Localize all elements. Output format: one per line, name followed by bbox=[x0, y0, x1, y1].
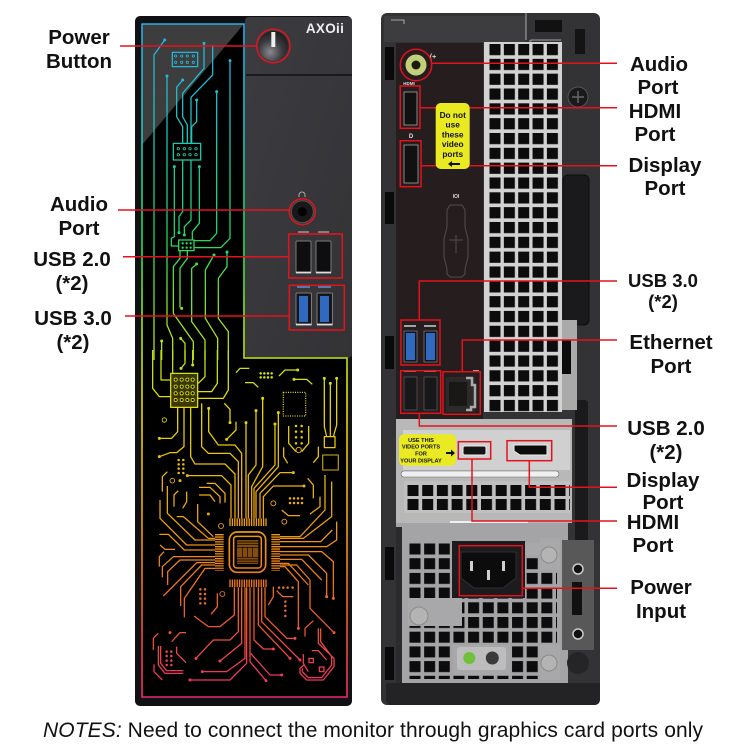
panel: front view of desktop tower bbox=[135, 16, 352, 706]
power supply grille bbox=[396, 523, 568, 692]
circuit traces lower bbox=[153, 350, 338, 681]
yellow instruction label bbox=[399, 434, 456, 466]
PSU screws bbox=[410, 547, 557, 671]
label: USB 3.0 rear: (*2) bbox=[648, 291, 678, 312]
rainbow outline bbox=[142, 24, 347, 697]
leader lines rear bbox=[419, 63, 617, 588]
front case body bbox=[135, 16, 352, 706]
rear case body bbox=[381, 13, 600, 705]
label: display port graphics card bbox=[627, 469, 700, 514]
metal patches around PSU fan holes bbox=[408, 538, 560, 680]
Ethernet port bbox=[443, 371, 480, 414]
DisplayPort graphics card bbox=[507, 441, 552, 461]
expansion bracket bbox=[396, 419, 572, 527]
yellow instruction label: YOUR DISPLAY bbox=[400, 459, 442, 465]
label: power input: Power bbox=[630, 576, 692, 599]
label: USB 3.0 rear: USB 3.0 bbox=[628, 270, 698, 291]
logo: AXOii bbox=[306, 21, 344, 36]
leader lines front bbox=[118, 46, 290, 316]
label: USB 2.0 front: USB 2.0 bbox=[33, 248, 111, 271]
label: USB 2.0 front bbox=[33, 248, 111, 295]
DisplayPort onboard bbox=[400, 134, 421, 187]
label: display port graphics card: Port bbox=[642, 491, 684, 514]
top rear lid bbox=[384, 16, 526, 42]
label: USB 2.0 rear bbox=[627, 417, 705, 464]
label: USB 2.0 rear: USB 2.0 bbox=[627, 417, 705, 440]
HDMI port onboard bbox=[400, 81, 420, 128]
yellow instruction label: VIDEO PORTS bbox=[402, 445, 440, 451]
label: USB 2.0 rear: (*2) bbox=[649, 441, 683, 464]
I/O plate bbox=[396, 43, 483, 419]
yellow warning label: video bbox=[442, 139, 464, 149]
label: ethernet port: Ethernet bbox=[629, 331, 713, 354]
label: ethernet port bbox=[629, 331, 713, 378]
label: USB 3.0 rear bbox=[628, 270, 698, 312]
HDMI port graphics card bbox=[458, 442, 491, 459]
label: HDMI port graphics card bbox=[627, 511, 679, 557]
glossy reflection bbox=[142, 24, 244, 145]
audio port rear bbox=[400, 49, 436, 81]
front grey fascia bbox=[245, 17, 352, 358]
label: USB 3.0 front bbox=[34, 307, 112, 354]
label: display port rear: Display bbox=[629, 154, 702, 177]
HDMI port onboard: HDMI bbox=[403, 81, 415, 86]
USB 3.0 ports front bbox=[289, 285, 344, 330]
label: display port graphics card: Display bbox=[627, 469, 700, 492]
label: audio port front: Audio bbox=[50, 193, 108, 216]
side mounting strip bbox=[562, 540, 594, 674]
label: audio port rear: Port bbox=[638, 76, 679, 99]
ventilation grille bbox=[484, 42, 562, 412]
DVI knockout bbox=[444, 194, 468, 277]
USB 2.0 ports rear bbox=[401, 371, 441, 413]
audio port rear: (+ bbox=[430, 54, 436, 61]
panel: rear view of desktop tower bbox=[381, 13, 617, 705]
label: HDMI port rear bbox=[629, 100, 681, 146]
label: power button bbox=[46, 26, 112, 73]
label: USB 2.0 front: (*2) bbox=[55, 272, 89, 295]
yellow instruction label: USE THIS bbox=[408, 438, 434, 444]
status LED module bbox=[457, 647, 506, 670]
label: power input: Input bbox=[636, 600, 686, 623]
handle bbox=[563, 175, 589, 325]
label: power button: Power bbox=[48, 26, 110, 49]
left side slots bbox=[385, 47, 394, 680]
label: HDMI port graphics card: Port bbox=[632, 534, 674, 557]
label: HDMI port rear: Port bbox=[634, 123, 676, 146]
label: USB 3.0 front: (*2) bbox=[56, 331, 90, 354]
label: HDMI port graphics card: HDMI bbox=[627, 511, 679, 534]
label: audio port front bbox=[50, 193, 108, 240]
yellow warning label bbox=[436, 103, 470, 169]
case foot bbox=[386, 683, 600, 705]
label: display port rear bbox=[629, 154, 702, 200]
CPU chip bbox=[229, 532, 266, 572]
DisplayPort onboard: D bbox=[409, 134, 414, 140]
circuit traces upper bbox=[154, 40, 230, 360]
thumb screw bbox=[568, 87, 588, 107]
notes footer: NOTES: Need to connect the monitor through graphics card ports only bbox=[43, 719, 704, 742]
label: power button: Button bbox=[46, 50, 112, 73]
label: ethernet port: Port bbox=[650, 355, 692, 378]
yellow instruction label: FOR bbox=[415, 451, 427, 457]
yellow warning label: use bbox=[446, 120, 460, 130]
yellow warning label: Do not bbox=[440, 110, 466, 120]
label: power input bbox=[630, 576, 692, 623]
label: audio port rear: Audio bbox=[630, 53, 688, 76]
yellow warning label: ports bbox=[442, 149, 463, 159]
USB 2.0 ports front bbox=[289, 232, 342, 278]
label: audio port rear bbox=[630, 53, 688, 99]
CPU connector combs bbox=[229, 522, 267, 583]
label: audio port front: Port bbox=[58, 217, 100, 240]
top bezel seam bbox=[246, 74, 352, 76]
label: display port rear: Port bbox=[644, 177, 686, 200]
label: USB 3.0 front: USB 3.0 bbox=[34, 307, 112, 330]
power input socket bbox=[452, 541, 525, 598]
USB 3.0 ports rear bbox=[401, 320, 440, 365]
label: HDMI port rear: HDMI bbox=[629, 100, 681, 123]
audio port front bbox=[289, 192, 315, 225]
DVI knockout: IOI bbox=[453, 194, 460, 200]
power button bbox=[257, 29, 290, 63]
yellow warning label: these bbox=[442, 130, 464, 140]
